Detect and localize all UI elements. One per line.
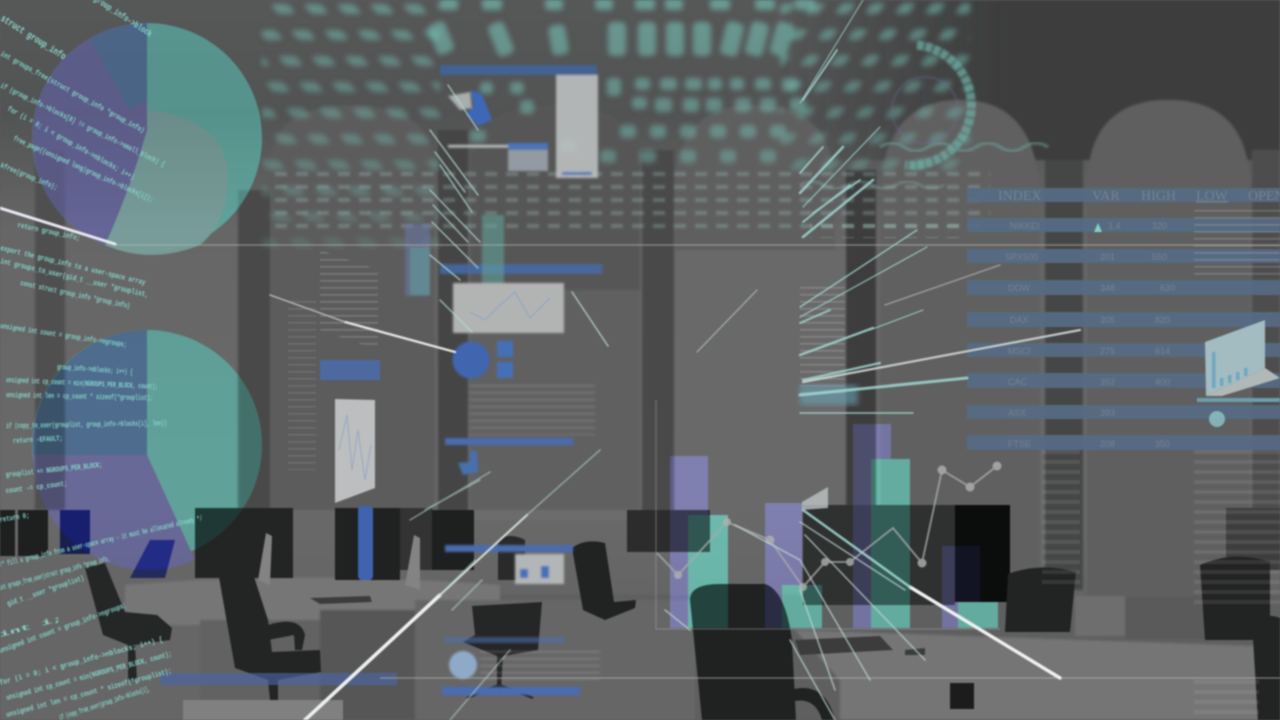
code lines: lower block: unsigned int count = group_info->ngroups;: [0, 602, 128, 656]
code lines: lower block: int groups_from_user(struct group_info *group_info,: [0, 556, 111, 593]
widget: teal block: [410, 247, 430, 295]
chair: navy far left: [130, 540, 175, 578]
table values: 305: [1100, 315, 1115, 325]
wave trail: lower: [800, 182, 944, 188]
arch: right two: [1087, 100, 1250, 600]
grid: left slanted: [262, 0, 440, 250]
table header: LOW: [1196, 189, 1229, 204]
widget: blue header: [508, 143, 548, 150]
stripes: code column: [1042, 450, 1080, 590]
ray: left middle: [345, 322, 455, 352]
chair base: middle front: [467, 685, 533, 698]
pie sector: blue top: [90, 23, 147, 110]
desk: dark pedestal: [320, 610, 415, 720]
blue label: [320, 360, 380, 380]
code lines: centre block: group_info->nblocks; i++) {: [57, 364, 133, 377]
table values: 820: [1155, 315, 1170, 325]
table values: 275: [1100, 346, 1115, 356]
table values: 320: [1152, 221, 1167, 231]
ceiling shadow: right: [780, 0, 1280, 160]
code lines: top block: for (i = 0; i < group_info->nblocks; i++): [6, 106, 135, 182]
rays: lower fan: [572, 290, 925, 720]
small teal rule: [1197, 398, 1280, 402]
pie sector: lavender: [33, 455, 195, 570]
bars: lavender overlay: [670, 424, 980, 628]
code lines: top block: int groups_free(struct group_info *group_info): [0, 51, 146, 136]
widget: header bar: [440, 65, 597, 75]
text rows: centre right: [810, 220, 960, 238]
widget: teal vertical block: [482, 215, 504, 283]
floor: [0, 595, 1280, 720]
arch: right one: [880, 100, 1040, 600]
chair: foreground centre: [690, 584, 835, 720]
rays: lower centre bundle: [410, 450, 600, 720]
blob: blue glow: [800, 385, 858, 405]
dashboard column: floating widgets: [405, 65, 602, 695]
white line chart card: [335, 399, 375, 503]
widget: blue donut: [466, 90, 492, 126]
widget: pie icon: [452, 342, 490, 378]
ray: lower right teal: [803, 510, 910, 587]
keyboards: [310, 596, 925, 655]
cabinet light: [1075, 596, 1125, 636]
horizontal scan lines: [115, 245, 1280, 678]
widget: line chart panel: [453, 283, 564, 333]
table values: DOW: [1008, 283, 1030, 293]
dot matrix: low contrast lower rows: [270, 165, 990, 233]
ray: lower right bright: [910, 587, 1060, 678]
code lines: second block: return group_info;: [16, 222, 81, 243]
code fragments: wall panels: [800, 220, 960, 395]
table values: NIKKEI: [1010, 221, 1040, 231]
grid: right slanted: [780, 0, 970, 180]
widget: white rule: [448, 145, 508, 148]
gauge: thin inner violet ring: [892, 77, 958, 143]
widget: donut small: [458, 450, 478, 475]
ray: lower left fading: [440, 515, 527, 595]
code lines: lower block: gid_t __user *grouplist): [6, 575, 86, 609]
table values: 208: [1100, 439, 1115, 449]
desk: centre floor: [415, 600, 695, 720]
table values: 201: [1100, 252, 1115, 262]
widget: small white panel: [515, 554, 564, 584]
stripes: right lower column: [1194, 450, 1280, 610]
ray: left middle faint: [270, 295, 345, 322]
widget: fifth bar: [442, 687, 580, 695]
table header: INDEX: [998, 189, 1042, 204]
card base: [1206, 368, 1280, 396]
isometric chart card: [1205, 320, 1280, 396]
pie sector: lavender: [32, 23, 147, 245]
pie chart: lower: [32, 330, 262, 570]
columns: [35, 130, 1280, 590]
wall: centre: [470, 105, 640, 510]
widget: fourth bar: [445, 545, 573, 552]
code lines: top block: free_page((unsigned long)group_info->blocks[i]);: [12, 135, 154, 205]
pie backing: brighten upper pie: [32, 23, 262, 253]
code lines: lower block: unsigned int len = cp_count * sizeof(*grouplist);: [6, 668, 173, 720]
code lines: centre block: return 0;: [0, 512, 30, 525]
code lines: centre block: unsigned int len = cp_count * sizeof(*grouplist);: [6, 392, 153, 403]
table rows: blue bands: [967, 188, 1280, 450]
table values: ASX: [1008, 408, 1026, 418]
chair: left foreground: [217, 558, 321, 700]
table values: [1005, 221, 1175, 449]
chair: far left: [85, 563, 172, 680]
code lines: second block: const struct group_info *group_info): [19, 280, 131, 311]
rays: far right table: [885, 265, 1000, 305]
code lines: top block: struct group_info: [0, 13, 68, 63]
table values: 350: [1155, 439, 1170, 449]
monitors and chairs: [0, 505, 1280, 720]
table values: 630: [1160, 283, 1175, 293]
floor and desks: [0, 552, 1280, 720]
ray: lower left bright: [305, 595, 440, 720]
stripes: right bottom: [1194, 678, 1259, 720]
wall cabinet: [1125, 597, 1205, 639]
monitors: left desks: [0, 508, 710, 580]
desk: left far: [0, 552, 210, 720]
up arrow marker: [1094, 223, 1102, 232]
bars: navy tint: [670, 424, 980, 628]
wave trail: right grid: [880, 143, 1048, 151]
code lines: centre block: [0, 364, 167, 525]
side panel: bars and white chart: [160, 250, 397, 720]
widget: text rules: [470, 385, 595, 435]
chair: middle: [572, 541, 636, 620]
widget: small table: [508, 148, 548, 171]
widget: second header bar: [440, 264, 602, 274]
bars: teal overlay: [688, 459, 998, 628]
bar chart: lavender and teal columns: [656, 400, 1000, 629]
widget: third header bar: [445, 438, 573, 445]
widget: white wedge: [448, 92, 472, 110]
pie base: teal: [32, 330, 262, 560]
card bars: [1212, 352, 1248, 388]
widget: tall white panel: [556, 75, 598, 178]
table values: MSCI: [1008, 346, 1030, 356]
widget: lower pie: [449, 651, 477, 679]
widget: sub bar: [445, 637, 565, 643]
table values: 614: [1155, 346, 1170, 356]
monitor: blue screen strip: [358, 506, 373, 580]
gauge: teal arc: [905, 45, 971, 165]
table values: 393: [1100, 408, 1115, 418]
code lines: centre block: unsigned int cp_count = min(NGROUPS_PER_BLOCK, count);: [6, 377, 158, 392]
grid: centre columns: [427, 0, 815, 163]
pie chart: upper: [32, 23, 262, 255]
table values: FTSE: [1008, 439, 1031, 449]
chart baseline frame: [656, 400, 1000, 629]
haze: centre corridor: [470, 290, 640, 520]
code lines: centre block: count -= cp_count;: [5, 480, 68, 496]
widget: violet block: [405, 224, 430, 296]
table values: 400: [1155, 377, 1170, 387]
table values: DAX: [1010, 315, 1029, 325]
widget: panel footer: [562, 172, 592, 175]
trend points: [674, 462, 1002, 591]
white card trace: [339, 415, 371, 480]
monitor stands: light triangles: [258, 533, 420, 590]
white panel: lower left: [183, 700, 343, 720]
pie base: teal: [32, 23, 262, 253]
code lines: second block: export the group_info to a user-space array: [0, 245, 146, 288]
text rules: right column: [1194, 205, 1280, 280]
ray: upper left: [0, 208, 115, 244]
data table: stock rows: [967, 188, 1280, 720]
table values: SPX500: [1005, 252, 1038, 262]
pie sector: blue-grey: [33, 330, 147, 455]
code lines: top block: [0, 0, 166, 205]
code lines: top block: kfree(group_info);: [0, 162, 58, 193]
table values: 1.4: [1108, 221, 1121, 231]
table values: CAC: [1008, 377, 1028, 387]
card face: [1205, 320, 1265, 396]
code text: left column: [0, 0, 204, 720]
arch: centre right: [675, 105, 835, 510]
line chart: trend markers: [657, 462, 1002, 591]
code lines: lower block: unsigned int cp_count = min(NGROUPS_PER_BLOCK, count);: [6, 651, 173, 703]
chair: middle back: [498, 536, 525, 580]
table values: 550: [1152, 252, 1167, 262]
bars: teal tint: [688, 459, 998, 628]
code lines: centre block: if (copy_to_user(grouplist, group_info->blocks[i], len)): [6, 420, 167, 431]
chairs: right side: [950, 557, 1280, 720]
code lines: centre block: grouplist += NGROUPS_PER_BLOCK;: [5, 462, 103, 480]
text rules: below: [288, 300, 316, 470]
white bright chip on monitor: [802, 487, 828, 510]
widget: text rules lower: [480, 650, 600, 680]
table header: [998, 189, 1280, 204]
line chart trace: [470, 292, 550, 320]
monitors: right desk: [803, 505, 1280, 605]
desk: base panel: [200, 620, 320, 720]
rays: centre top bundle: [430, 85, 480, 332]
table values: 352: [1100, 377, 1115, 387]
code lines: top block: if (group_info->blocks[0] != group_info->small_block) {: [0, 83, 166, 169]
desk: left top: [125, 578, 500, 625]
small teal icon: [1209, 411, 1225, 427]
table header: HIGH: [1141, 189, 1176, 204]
dot matrix: teal perspective data grid: [262, 0, 970, 250]
code lines: lower block: for (i = 0; i < group_info->nblocks; i++) {: [0, 636, 164, 688]
text rules: left wall: [320, 250, 378, 350]
rays: right fan: [800, 0, 967, 413]
table values: 348: [1100, 283, 1115, 293]
code lines: second block: unsigned int count = group_info->ngroups;: [0, 323, 127, 350]
code lines: lower block: [0, 515, 204, 720]
wall: left: [270, 105, 435, 510]
pie sector: light inner: [105, 110, 228, 255]
pale ticks: centre right column: [800, 285, 845, 395]
blue bar: lower left: [160, 673, 397, 685]
code lines: second block: int groups_to_user(gid_t __user *grouplist,: [0, 258, 149, 300]
widget: square icons: [497, 341, 513, 378]
widget: small bars: [520, 566, 549, 578]
chair: middle front: [463, 602, 542, 690]
desk: right top: [795, 630, 1258, 720]
code lines: lower block: /* fill a group_info from a user-space array - it must be allocated already */: [0, 515, 204, 570]
wall: lower centre right: [675, 250, 845, 510]
code lines: second block: [0, 222, 149, 350]
code lines: centre block: return -EFAULT;: [13, 435, 63, 446]
table header: VAR: [1092, 189, 1120, 204]
ray: right long: [803, 330, 1080, 382]
gauge ring: [892, 45, 971, 165]
